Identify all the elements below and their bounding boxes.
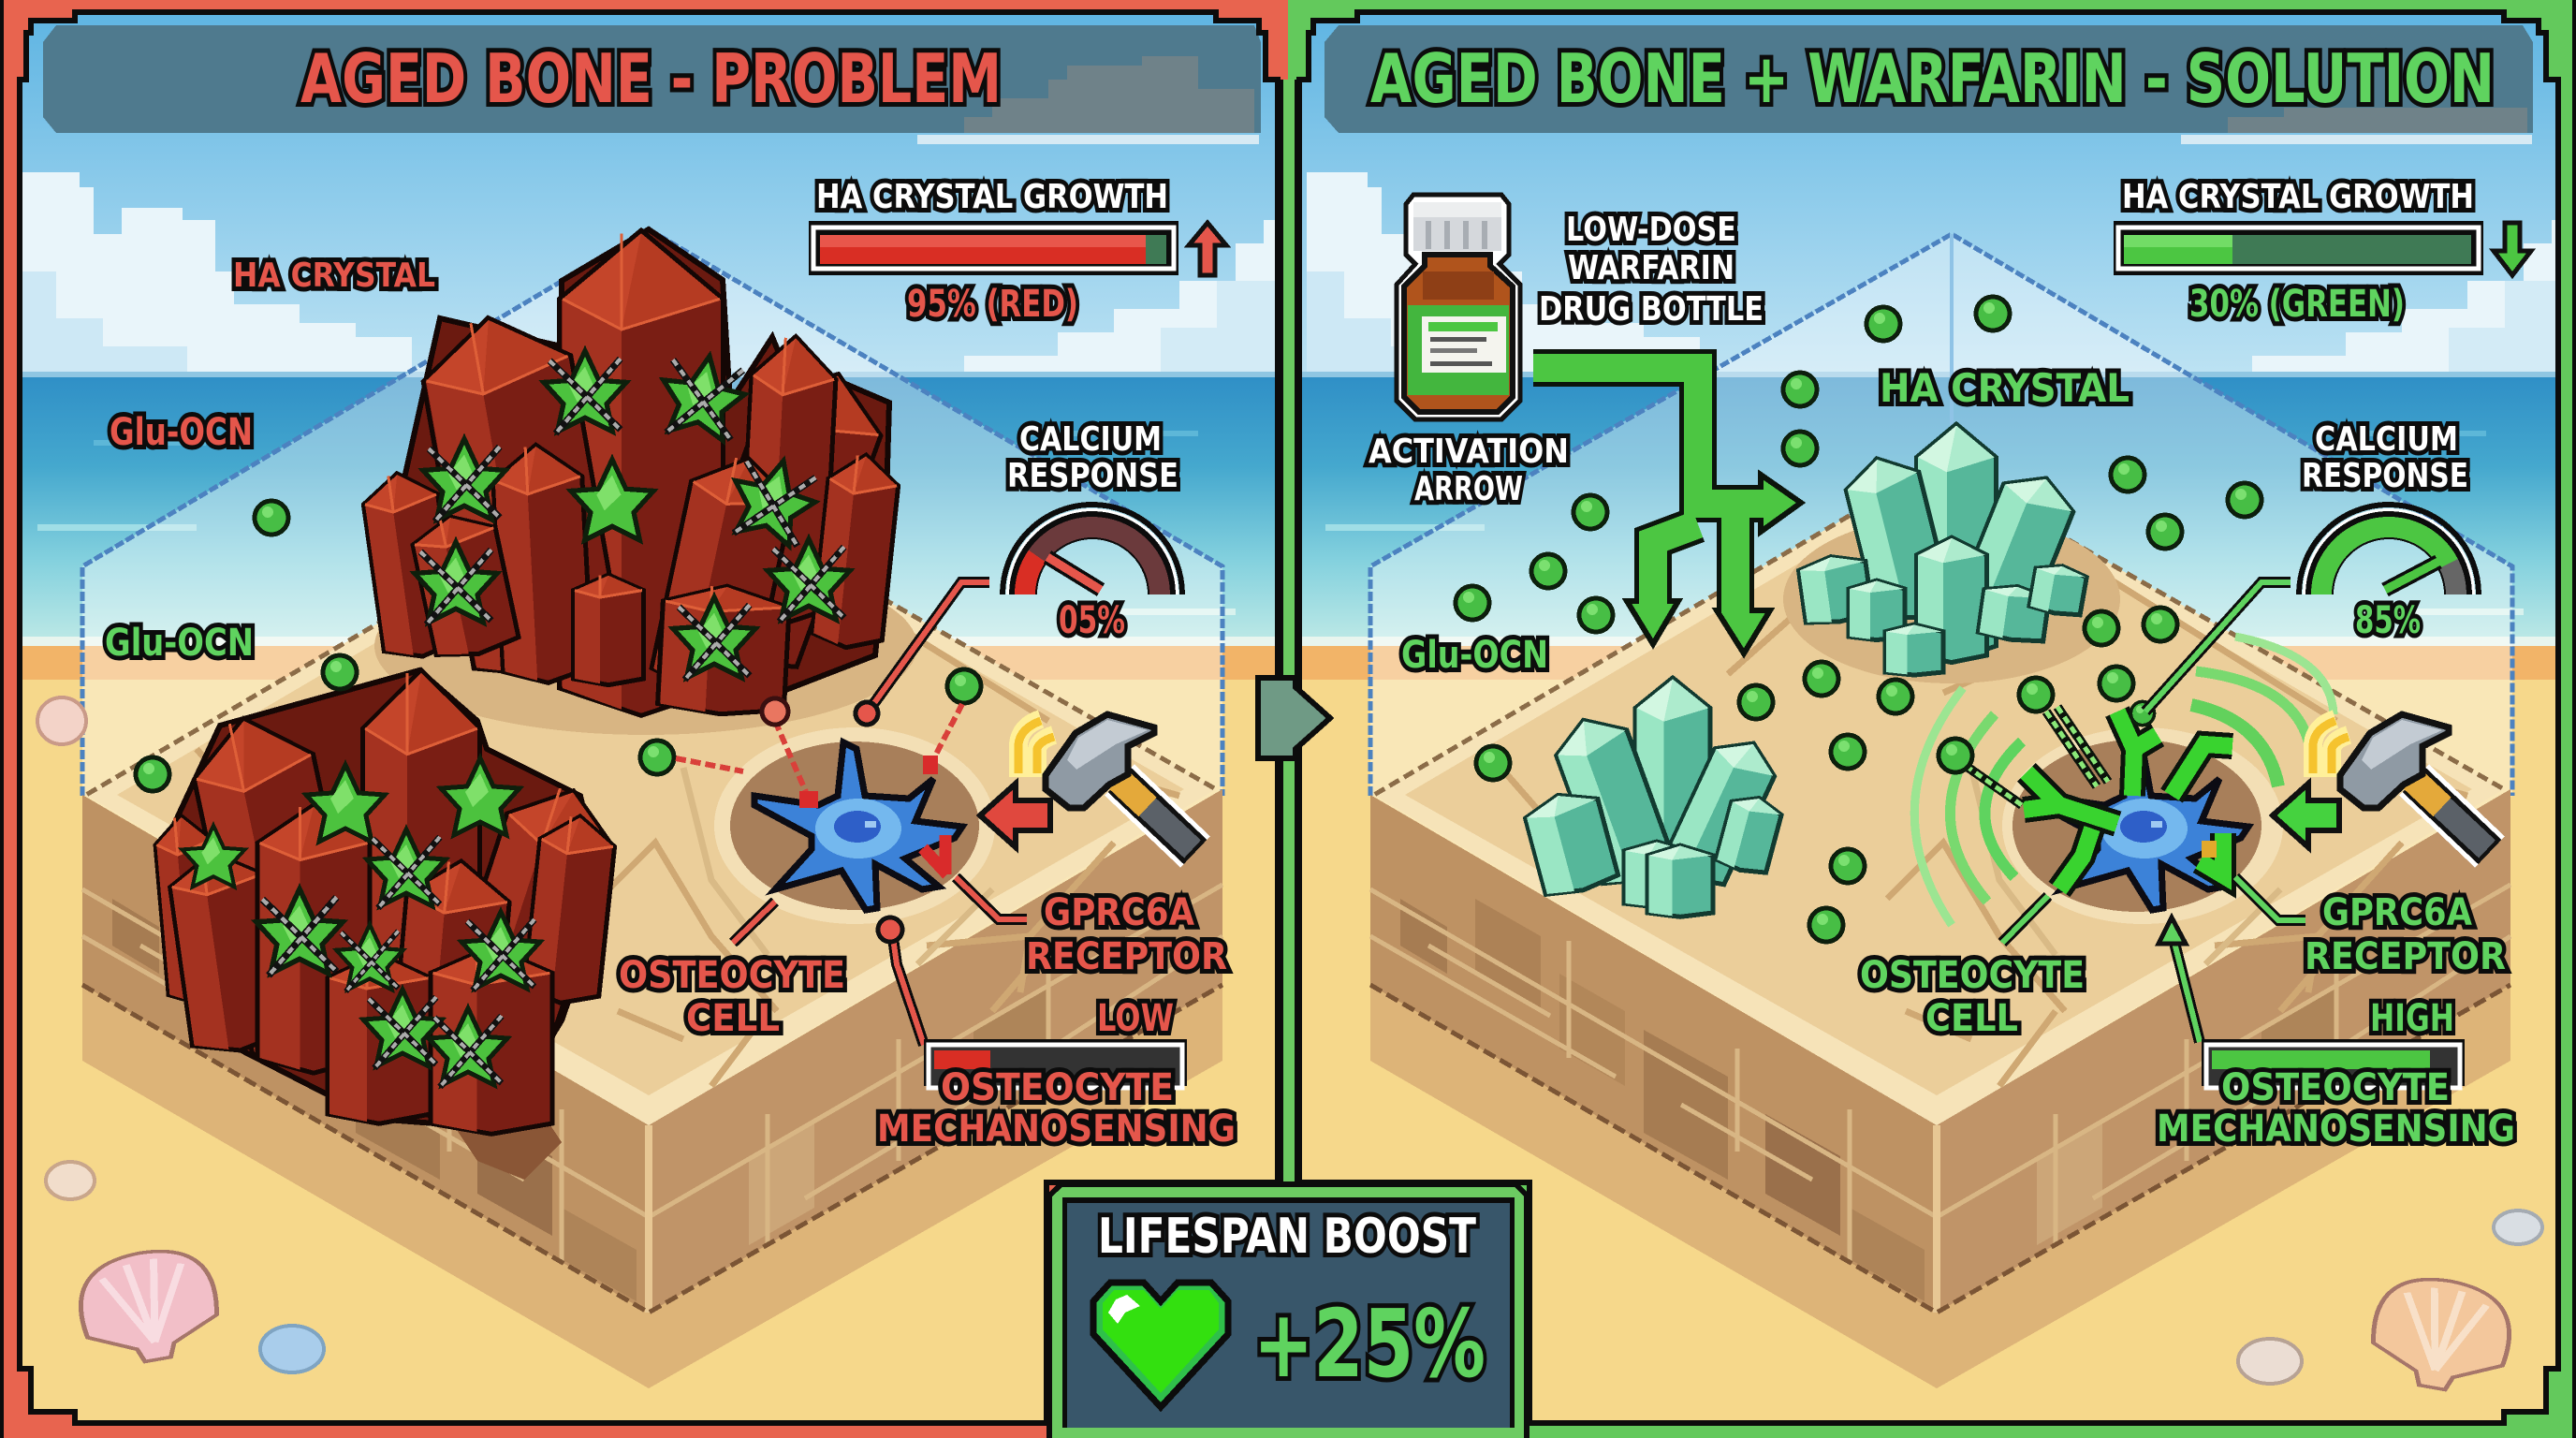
glass box: problem (82, 229, 1222, 1125)
calcium response gauge low: CALCIUM (1019, 420, 1162, 459)
osteocyte cell (754, 742, 962, 910)
calcium response gauge high: RESPONSE (2302, 457, 2468, 495)
osteocyte mechanosensing low meter: OSTEOCYTE (941, 1066, 1174, 1109)
seashells (37, 697, 2542, 1400)
label: osteocyte cell (1860, 954, 2085, 1040)
platform: problem (81, 599, 1223, 1314)
weak signalling links (676, 698, 962, 808)
hammer load icon (1018, 714, 1195, 852)
lower red crystal cluster (154, 670, 627, 1134)
gauge bar: HA crystal growth low: 30% (GREEN) (2189, 283, 2405, 326)
osteocyte mechanosensing low meter (877, 997, 1236, 1151)
leader: mechanosensing (2159, 917, 2200, 1042)
icon: down arrow (2494, 223, 2531, 275)
upper red crystal cluster (360, 229, 901, 717)
icon: up arrow (1189, 223, 1226, 275)
label: low-dose warfarin drug bottle: LOW-DOSE (1566, 211, 1736, 249)
label: HA crystal: HA CRYSTAL (1880, 365, 2130, 411)
label: HA crystal: HA CRYSTAL (233, 257, 435, 295)
label: osteocyte cell (619, 954, 845, 1040)
title bar: problem (43, 25, 1261, 144)
label: low-dose warfarin drug bottle: DRUG BOTTLE (1539, 290, 1764, 329)
lifespan value: +25% (1253, 1289, 1486, 1399)
gauge bar: HA crystal growth high: 95% (RED) (907, 283, 1078, 326)
label: osteocyte cell: CELL (686, 997, 780, 1040)
osteocyte cell (2041, 742, 2248, 910)
label: GPRC6A receptor: RECEPTOR (2305, 935, 2506, 978)
label: activation arrow: ACTIVATION (1368, 433, 1569, 471)
label: activation arrow (1368, 433, 1569, 508)
title bar: solution (1325, 25, 2533, 144)
red load arrow (980, 784, 1050, 847)
label: GPRC6A receptor: GPRC6A (1044, 891, 1194, 934)
osteocyte mechanosensing high meter: HIGH (2370, 997, 2454, 1040)
green load arrow (2273, 784, 2339, 847)
GPRC6A receptor blocked (923, 835, 947, 874)
label: low-dose warfarin drug bottle (1539, 211, 1764, 329)
glass box: solution (1370, 234, 2512, 1125)
label: osteocyte cell: OSTEOCYTE (1860, 954, 2085, 997)
leader: calcium gauge to cell (2145, 582, 2291, 712)
upper green crystal cluster (1797, 424, 2087, 675)
panel: aged bone problem (0, 0, 1288, 1438)
centre divider (1278, 80, 1299, 1189)
platform: solution (1370, 464, 2510, 1313)
osteocyte mechanosensing low meter: MECHANOSENSING (877, 1108, 1236, 1151)
label: GPRC6A receptor (1026, 891, 1227, 978)
lower green crystal cluster (1522, 678, 1784, 917)
label: low-dose warfarin drug bottle: WARFARIN (1568, 249, 1734, 287)
calcium response gauge low: RESPONSE (1007, 457, 1178, 495)
leader: osteocyte cell (2002, 896, 2048, 943)
gauge bar: HA crystal growth high: HA CRYSTAL GROWTH (816, 178, 1168, 216)
osteocyte lacuna (2012, 740, 2261, 912)
tan halo under upper green crystals (1783, 515, 2120, 683)
centre divider arrow (1258, 678, 1330, 758)
label: GPRC6A receptor (2305, 891, 2506, 978)
calcium response gauge high: 85% (2355, 599, 2421, 642)
gauge bar: HA crystal growth low (2114, 178, 2483, 326)
osteocyte mechanosensing low meter: LOW (1097, 997, 1174, 1040)
shadow under lower crystal cluster (457, 1126, 562, 1180)
leader: GPRC6A (2235, 877, 2305, 920)
panel: aged bone plus warfarin solution (1288, 0, 2576, 1438)
calcium response gauge high: CALCIUM (2315, 420, 2458, 459)
label: osteocyte cell: CELL (1925, 997, 2018, 1040)
label: free Glu-OCN: Glu-OCN (105, 622, 254, 665)
callout: lifespan boost (1046, 1181, 1530, 1438)
leader: osteocyte cell (733, 902, 775, 943)
label: osteocyte cell: OSTEOCYTE (619, 954, 845, 997)
label: Glu-OCN: Glu-OCN (1401, 634, 1548, 677)
osteocyte lacuna (730, 741, 979, 910)
calcium response gauge low (1003, 420, 1182, 642)
green processes on osteocyte (2024, 712, 2232, 889)
activated receptor core (2202, 841, 2217, 858)
icon: green heart (1093, 1283, 1228, 1407)
outer frame: problem panel red (0, 0, 1288, 1438)
osteocyte mechanosensing high meter (2157, 997, 2515, 1151)
tan halo under upper crystal cluster (374, 606, 915, 735)
signal wave arcs (1914, 637, 2334, 925)
gauge bar: HA crystal growth low: HA CRYSTAL GROWTH (2122, 178, 2474, 216)
activation arrow (1533, 368, 1801, 653)
icon: warfarin drug bottle (1397, 195, 1520, 419)
active signalling links and bound dots (1939, 667, 2155, 805)
hammer load icon (2313, 714, 2490, 852)
calcium response gauge high (2299, 420, 2479, 642)
label: GPRC6A receptor: GPRC6A (2322, 891, 2472, 934)
calcium response gauge low: 05% (1059, 599, 1125, 642)
label: GPRC6A receptor: RECEPTOR (1026, 935, 1227, 978)
label: bound Glu-OCN: Glu-OCN (110, 411, 253, 454)
gauge bar: HA crystal growth high (809, 178, 1178, 326)
free Glu-OCN dots (136, 501, 981, 791)
leader: GPRC6A (956, 877, 1027, 919)
osteocyte mechanosensing high meter: OSTEOCYTE (2221, 1066, 2450, 1109)
free Glu-OCN dots (1456, 297, 2261, 942)
outer frame: solution panel green (1288, 0, 2576, 1438)
leader: calcium gauge to cell (856, 582, 989, 725)
osteocyte mechanosensing high meter: MECHANOSENSING (2157, 1108, 2515, 1151)
label: activation arrow: ARROW (1414, 470, 1523, 508)
heading: problem: AGED BONE - PROBLEM (300, 39, 1002, 118)
leader: mechanosensing (878, 917, 924, 1045)
lifespan heading: LIFESPAN BOOST (1098, 1209, 1476, 1265)
